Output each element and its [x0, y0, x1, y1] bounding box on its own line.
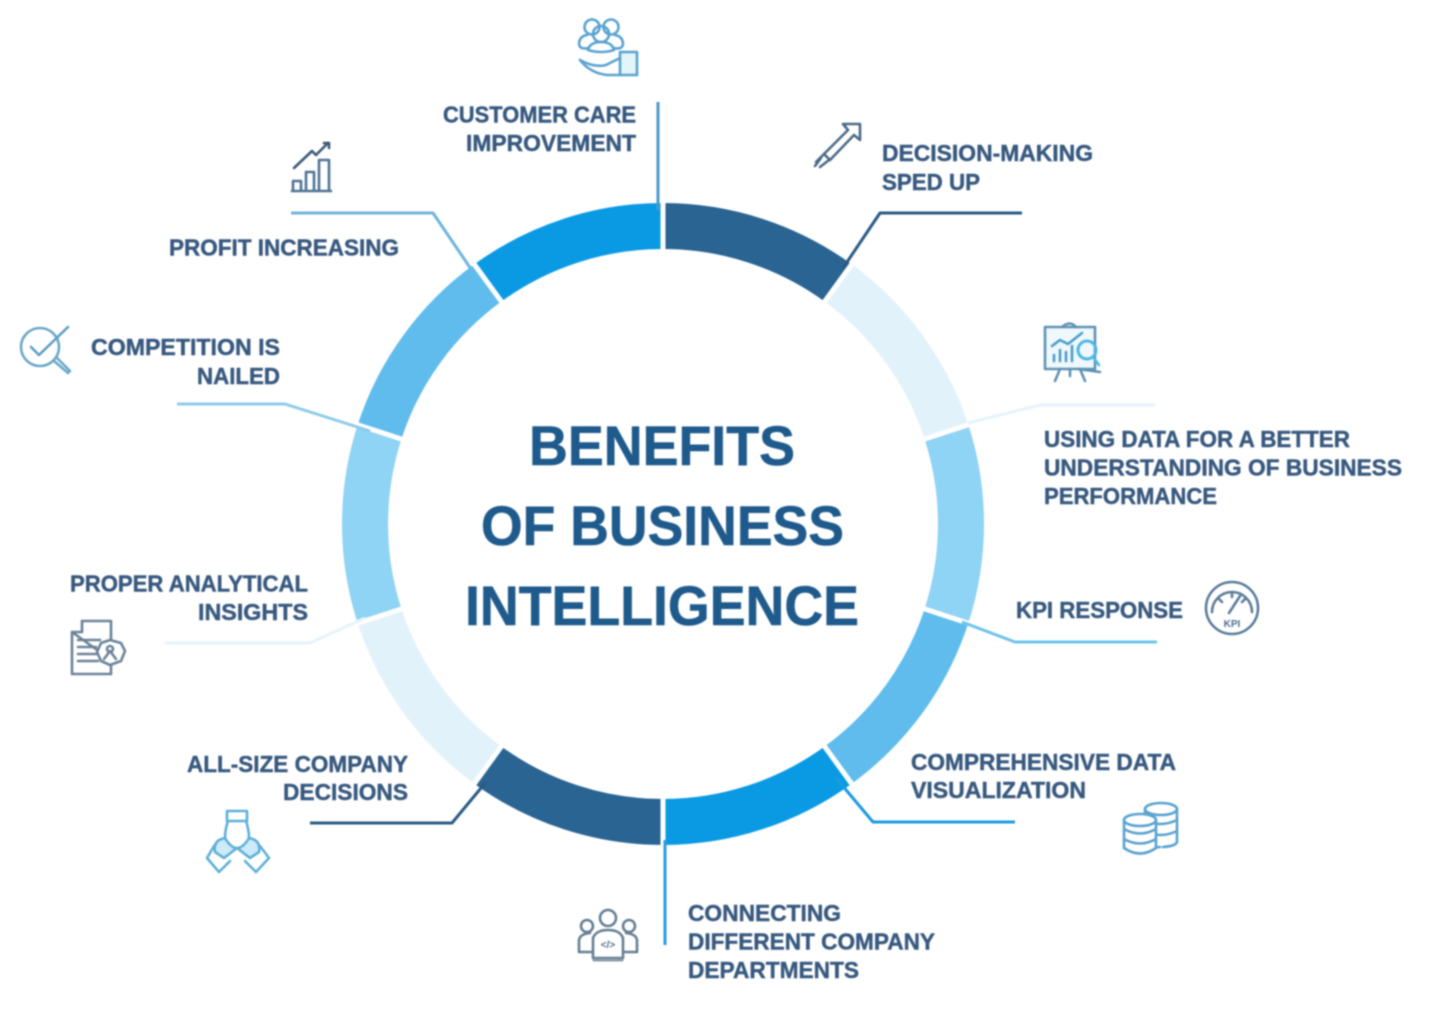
label: customer care improvement: IMPROVEMENT	[466, 130, 636, 156]
icon: KPI gauge	[1206, 582, 1258, 634]
label: connecting departments: CONNECTING	[688, 900, 841, 926]
segment: analytical insights	[358, 609, 501, 784]
icon: team of developers	[579, 910, 637, 960]
label: comprehensive data visualization: COMPREHENSIVE DATA	[911, 749, 1176, 775]
title	[465, 414, 859, 637]
label: decision-making sped up	[882, 140, 1093, 195]
label: proper analytical insights: INSIGHTS	[198, 599, 308, 625]
segment: all-size decisions	[474, 746, 663, 845]
segment: data visualization	[825, 609, 968, 784]
label: all-size company decisions: ALL-SIZE COMPANY	[187, 751, 408, 777]
label: using data: PERFORMANCE	[1044, 483, 1217, 509]
connector lines	[165, 102, 1157, 945]
icon: team of developers: </>	[601, 940, 615, 951]
label: competition is nailed: COMPETITION IS	[91, 334, 280, 360]
title: OF BUSINESS	[481, 494, 844, 557]
segment: connecting departments	[663, 746, 852, 845]
segment: KPI response	[924, 425, 984, 623]
icon: KPI gauge: KPI	[1224, 619, 1241, 630]
label: customer care improvement: CUSTOMER CARE	[443, 102, 636, 128]
label: all-size company decisions	[187, 751, 408, 805]
label: competition is nailed	[91, 334, 280, 389]
label: using data: USING DATA FOR A BETTER	[1044, 426, 1350, 452]
icon: database	[1124, 803, 1177, 854]
label: proper analytical insights	[70, 570, 308, 625]
label: decision-making sped up: DECISION-MAKING	[882, 140, 1093, 166]
title: INTELLIGENCE	[465, 574, 859, 637]
label: proper analytical insights: PROPER ANALYTICAL	[70, 570, 308, 596]
icon: presentation board	[1045, 324, 1100, 381]
icon: three joined hands	[207, 811, 269, 872]
label: comprehensive data visualization: VISUALIZATION	[911, 777, 1086, 803]
segment: decision-making	[663, 203, 852, 302]
segment: profit	[358, 264, 501, 439]
icon: rocket arrow	[815, 124, 860, 167]
segment: using data	[825, 264, 968, 439]
label: competition is nailed: NAILED	[197, 363, 280, 389]
icon: growth bars	[292, 143, 331, 191]
label: comprehensive data visualization	[911, 749, 1176, 803]
label: all-size company decisions: DECISIONS	[283, 779, 408, 805]
label: connecting departments	[688, 900, 935, 983]
label: using data	[1044, 426, 1402, 509]
label: decision-making sped up: SPED UP	[882, 169, 980, 195]
icon: people in hand	[579, 20, 637, 75]
label: KPI response: KPI RESPONSE	[1016, 597, 1183, 623]
segment: competition	[342, 425, 402, 623]
label: profit increasing: PROFIT INCREASING	[169, 234, 399, 260]
title: BENEFITS	[529, 414, 795, 477]
ring of ten segments	[342, 196, 984, 852]
label: using data: UNDERSTANDING OF BUSINESS	[1044, 454, 1402, 480]
icon: document with badge	[72, 621, 125, 674]
label: customer care improvement	[443, 102, 636, 156]
label: connecting departments: DIFFERENT COMPANY	[688, 928, 935, 954]
label: connecting departments: DEPARTMENTS	[688, 957, 859, 983]
segment: customer care	[474, 203, 663, 302]
icon: magnifier with check	[21, 327, 70, 373]
